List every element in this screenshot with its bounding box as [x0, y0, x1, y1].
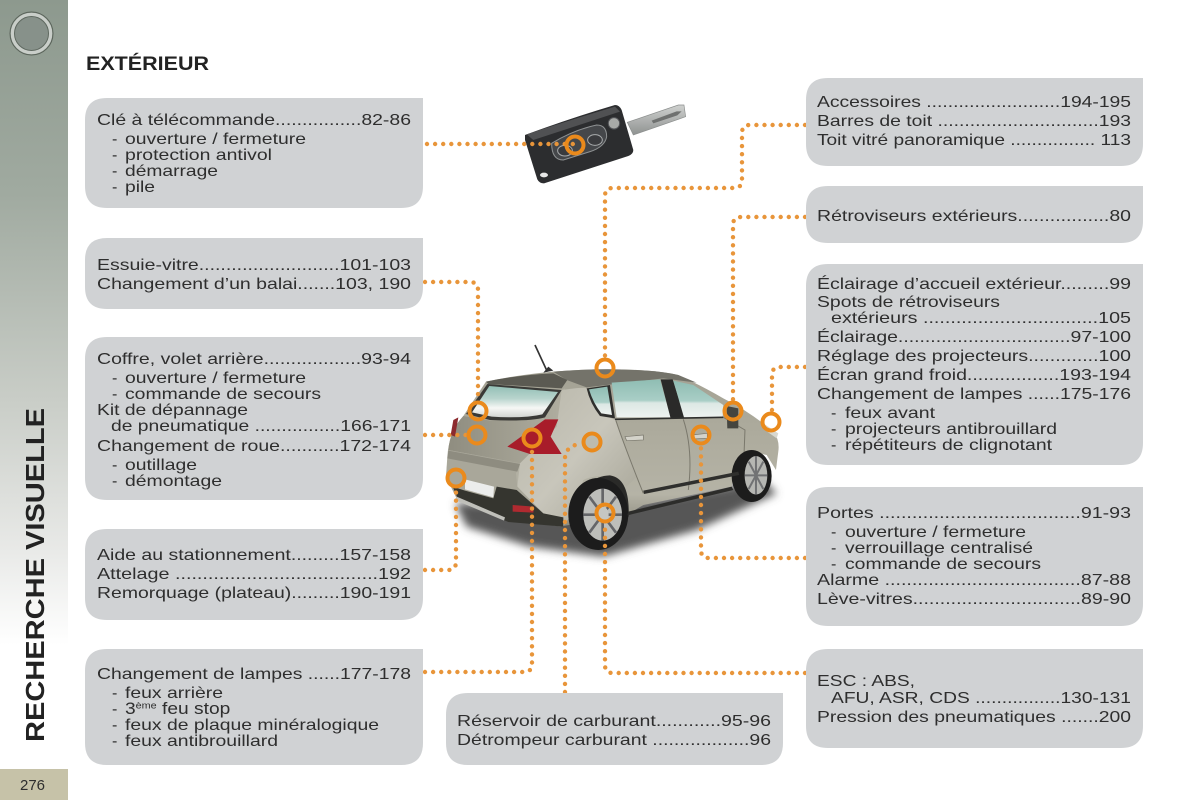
marker: rear lamp	[524, 430, 540, 446]
connector: doors	[701, 444, 805, 558]
panel: boot and wheel: Coffre, volet arrière..................93-94	[97, 351, 411, 368]
marker: key	[566, 136, 584, 154]
headlamp	[763, 423, 778, 438]
fuel flap	[585, 434, 602, 451]
panel: rear lamps: -	[112, 733, 117, 750]
door seams	[616, 417, 745, 493]
panel: rear lamps: feux arrière	[125, 685, 223, 702]
panel: lighting: -	[831, 421, 836, 438]
marker: mirror	[724, 402, 742, 420]
panel: rear lamps: feux de plaque minéralogique	[125, 717, 379, 734]
mirror	[727, 406, 738, 428]
panel: boot and wheel: de pneumatique ................166-171	[111, 418, 411, 435]
panel: doors: verrouillage centralisé	[845, 540, 1033, 557]
panel: doors: Alarme ....................................87-88	[817, 572, 1131, 589]
connector: fuel	[565, 442, 582, 692]
panel: rear lamps: -	[112, 717, 117, 734]
panel: rear lamps: feux antibrouillard	[125, 733, 278, 750]
connector: wheels	[605, 522, 805, 673]
title: EXTÉRIEUR	[86, 53, 209, 75]
panel: boot and wheel: -	[112, 457, 117, 474]
panel: lighting: extérieurs ................................105	[831, 310, 1131, 327]
panel: boot and wheel	[85, 337, 423, 500]
panel: doors: ouverture / fermeture	[845, 524, 1026, 541]
panel: fuel: Détrompeur carburant ..................96	[457, 732, 771, 749]
panel: key: -	[112, 147, 117, 164]
door handles	[625, 435, 643, 441]
illustration: key fob	[525, 105, 686, 183]
panel: lighting: répétiteurs de clignotant	[845, 437, 1053, 454]
panel: lighting: feux avant	[845, 405, 936, 422]
panel: key	[85, 98, 423, 208]
panel: wipers: Changement d’un balai.......103, 190	[97, 276, 411, 293]
panel: boot and wheel: -	[112, 386, 117, 403]
panel: roof: Accessoires .........................194-195	[817, 94, 1131, 111]
quarter panel	[517, 388, 637, 526]
section label: recherche visuelle: RECHERCHE VISUELLE	[20, 408, 50, 742]
marker: tow bar	[448, 470, 464, 486]
connector: lights	[772, 367, 805, 412]
connector: key	[427, 142, 575, 146]
panel: lighting: Écran grand froid.................193-194	[817, 365, 1131, 384]
panel: rear lamps	[85, 649, 423, 765]
panel: parking: Remorquage (plateau).........190-191	[97, 585, 411, 602]
panel: key: -	[112, 131, 117, 148]
panel: rear lamps: ème	[136, 701, 157, 712]
panel: lighting: Changement de lampes ......175-176	[817, 386, 1131, 403]
front wheel	[732, 450, 772, 502]
roof	[553, 369, 697, 387]
panel: key: démarrage	[125, 163, 218, 180]
panel: rear lamps: feu stop	[157, 699, 230, 718]
panel: mirrors: Rétroviseurs extérieurs.................80	[817, 208, 1131, 225]
panel: boot and wheel: -	[112, 473, 117, 490]
marker: headlamp	[762, 414, 780, 430]
car body	[446, 369, 779, 526]
panel: parking: Attelage .....................................192	[97, 566, 411, 583]
panel: doors: Lève-vitres...............................89-90	[817, 591, 1131, 608]
connector: roof	[605, 125, 805, 358]
panel: parking	[85, 529, 423, 620]
panel: stability: Pression des pneumatiques .......200	[817, 709, 1131, 726]
panel: roof: Toit vitré panoramique ................ 113	[817, 132, 1131, 149]
icon: chapter ring	[10, 12, 53, 55]
rear window	[466, 384, 562, 420]
rear wheel	[568, 478, 628, 550]
panel: key: ouverture / fermeture	[125, 131, 306, 148]
panel: doors: -	[831, 524, 836, 541]
panel: lighting: Éclairage d’accueil extérieur.........99	[817, 274, 1131, 293]
panel: key: Clé à télécommande................82-86	[97, 112, 411, 129]
rear wheel arch	[572, 475, 629, 527]
page number: 276	[20, 777, 45, 794]
panel: lighting: Spots de rétroviseurs	[817, 294, 1000, 311]
panel: doors: -	[831, 540, 836, 557]
side windows	[587, 385, 615, 418]
car shadow	[455, 480, 777, 557]
marker: wheel	[596, 504, 614, 522]
panel: boot and wheel: démontage	[125, 473, 222, 490]
panel: wipers: Essuie-vitre..........................101-103	[97, 257, 411, 274]
panel: stability	[806, 649, 1143, 748]
panel: boot and wheel: Changement de roue...........172-174	[97, 438, 411, 455]
panel: fuel	[446, 693, 783, 765]
side sill	[643, 472, 739, 494]
panel: boot and wheel: Kit de dépannage	[97, 402, 248, 419]
panel: doors: -	[831, 556, 836, 573]
panel: lighting	[806, 264, 1143, 465]
panel: lighting: Réglage des projecteurs.............100	[817, 348, 1131, 365]
panel: key: protection antivol	[125, 147, 272, 164]
spoiler	[486, 373, 567, 388]
connector: rear lamps	[425, 448, 532, 672]
page number	[0, 769, 68, 800]
panel: doors: commande de secours	[845, 556, 1041, 573]
tail light	[507, 419, 562, 454]
panel: parking: Aide au stationnement.........157-158	[97, 547, 411, 564]
rear face	[448, 388, 565, 463]
marker: fuel	[584, 434, 600, 450]
panel: doors	[806, 487, 1143, 626]
panel: lighting: -	[831, 405, 836, 422]
marker: wiper	[470, 402, 486, 420]
panel: rear lamps: Changement de lampes ......177-178	[97, 666, 411, 683]
marker: boot	[468, 426, 486, 444]
panel: roof: Barres de toit ..............................193	[817, 113, 1131, 130]
panel: stability: AFU, ASR, CDS ................130-131	[831, 690, 1131, 707]
panel: lighting: projecteurs antibrouillard	[845, 421, 1057, 438]
panel: boot and wheel: -	[112, 370, 117, 387]
connector: boot	[425, 433, 468, 437]
connector: mirrors	[733, 217, 805, 402]
illustration: car	[446, 345, 779, 557]
connector: parking	[425, 488, 456, 570]
panel: rear lamps: 3	[125, 699, 136, 718]
panel: roof	[806, 78, 1143, 166]
panel: key: pile	[125, 179, 155, 196]
panel: wipers	[85, 238, 423, 309]
panel: boot and wheel: ouverture / fermeture	[125, 370, 306, 387]
panel: lighting: -	[831, 437, 836, 454]
panel: rear lamps: -	[112, 701, 117, 718]
antenna	[535, 345, 547, 372]
panel: doors: Portes .....................................91-93	[817, 505, 1131, 522]
marker: door	[692, 426, 710, 444]
panel: fuel: Réservoir de carburant............95-96	[457, 713, 771, 730]
rear bumper	[446, 450, 563, 527]
panel: key: -	[112, 163, 117, 180]
sidebar	[0, 0, 68, 645]
panel: boot and wheel: outillage	[125, 457, 197, 474]
panel: lighting: Éclairage................................97-100	[817, 327, 1131, 346]
panel: stability: ESC : ABS,	[817, 673, 915, 690]
panel: mirrors	[806, 186, 1143, 243]
panel: boot and wheel: commande de secours	[125, 386, 321, 403]
marker: roof	[596, 360, 614, 376]
connector: wipers	[425, 282, 478, 402]
panel: rear lamps: -	[112, 685, 117, 702]
panel: key: -	[112, 179, 117, 196]
